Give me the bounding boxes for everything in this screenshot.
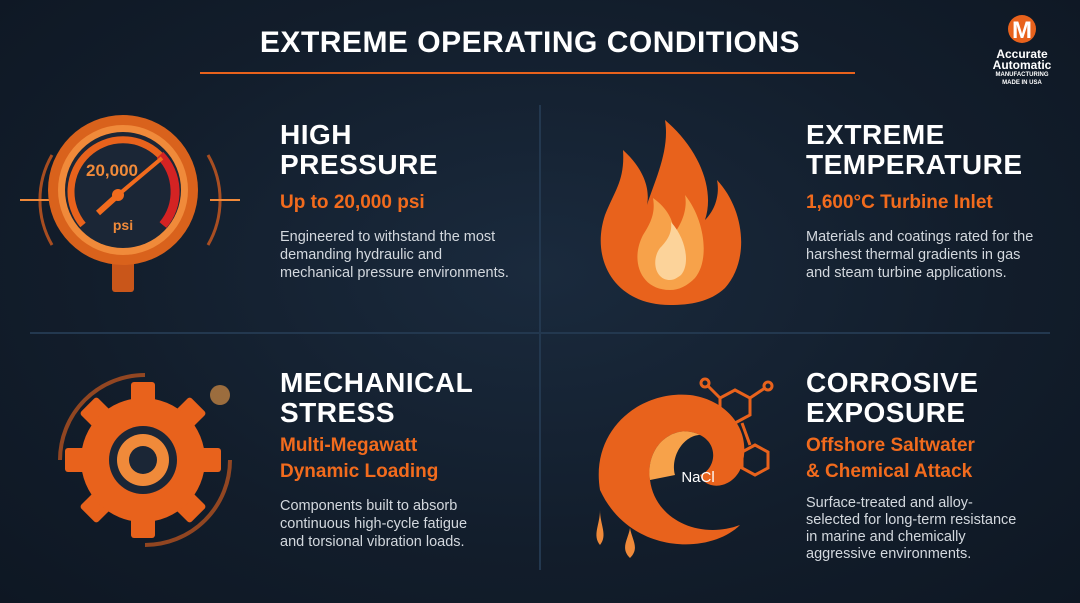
panel: corrosive exposure: Offshore Saltwater: [806, 435, 975, 456]
icon: pressure gauge: psi: [113, 217, 133, 233]
panel: corrosive exposure: [806, 367, 1016, 562]
panel: corrosive exposure: aggressive environments.: [806, 546, 971, 562]
logo: MANUFACTURING: [996, 72, 1048, 78]
panel: mechanical stress: STRESS: [280, 397, 395, 428]
logo: [993, 15, 1051, 86]
panel: high pressure: [280, 119, 509, 281]
panel: corrosive exposure: Surface-treated and alloy-: [806, 495, 973, 511]
icon: pressure gauge: 20,000: [86, 161, 138, 180]
panel: high pressure: mechanical pressure environments.: [280, 265, 509, 281]
panel: extreme temperature: EXTREME: [806, 119, 945, 150]
logo: Accurate: [996, 47, 1048, 61]
panel: corrosive exposure: CORROSIVE: [806, 367, 979, 398]
panel: mechanical stress: Components built to absorb: [280, 498, 457, 514]
panel: mechanical stress: MECHANICAL: [280, 367, 473, 398]
panel: high pressure: PRESSURE: [280, 149, 438, 180]
panel: mechanical stress: Dynamic Loading: [280, 461, 438, 482]
panel: mechanical stress: continuous high-cycle fatigue: [280, 516, 467, 532]
panel: mechanical stress: Multi-Megawatt: [280, 435, 417, 456]
logo: M: [1012, 17, 1032, 44]
icon: gear: [58, 373, 232, 547]
icon: pressure gauge: [20, 115, 240, 292]
panel: high pressure: HIGH: [280, 119, 352, 150]
icon: flame: [600, 120, 742, 305]
panel: extreme temperature: TEMPERATURE: [806, 149, 1023, 180]
panel: extreme temperature: and steam turbine applications.: [806, 265, 1007, 281]
panel: mechanical stress: [280, 367, 473, 550]
panel: corrosive exposure: & Chemical Attack: [806, 461, 972, 482]
icon: corrosive wave: NaCl: [681, 469, 715, 486]
icon: corrosive wave: [596, 378, 774, 558]
panel: high pressure: Engineered to withstand the most: [280, 229, 495, 245]
panel: mechanical stress: and torsional vibration loads.: [280, 534, 465, 550]
panel: high pressure: demanding hydraulic and: [280, 247, 442, 263]
panel: corrosive exposure: EXPOSURE: [806, 397, 966, 428]
panel: extreme temperature: Materials and coatings rated for the: [806, 229, 1033, 245]
panel: corrosive exposure: in marine and chemically: [806, 529, 966, 545]
panel: extreme temperature: 1,600°C Turbine Inlet: [806, 192, 993, 213]
panel: corrosive exposure: selected for long-term resistance: [806, 512, 1016, 528]
logo: Automatic: [993, 58, 1051, 72]
panel: extreme temperature: harshest thermal gradients in gas: [806, 247, 1020, 263]
panel: high pressure: Up to 20,000 psi: [280, 192, 425, 213]
logo: MADE IN USA: [1002, 80, 1042, 86]
title: EXTREME OPERATING CONDITIONS: [260, 26, 800, 59]
panel: extreme temperature: [806, 119, 1033, 281]
